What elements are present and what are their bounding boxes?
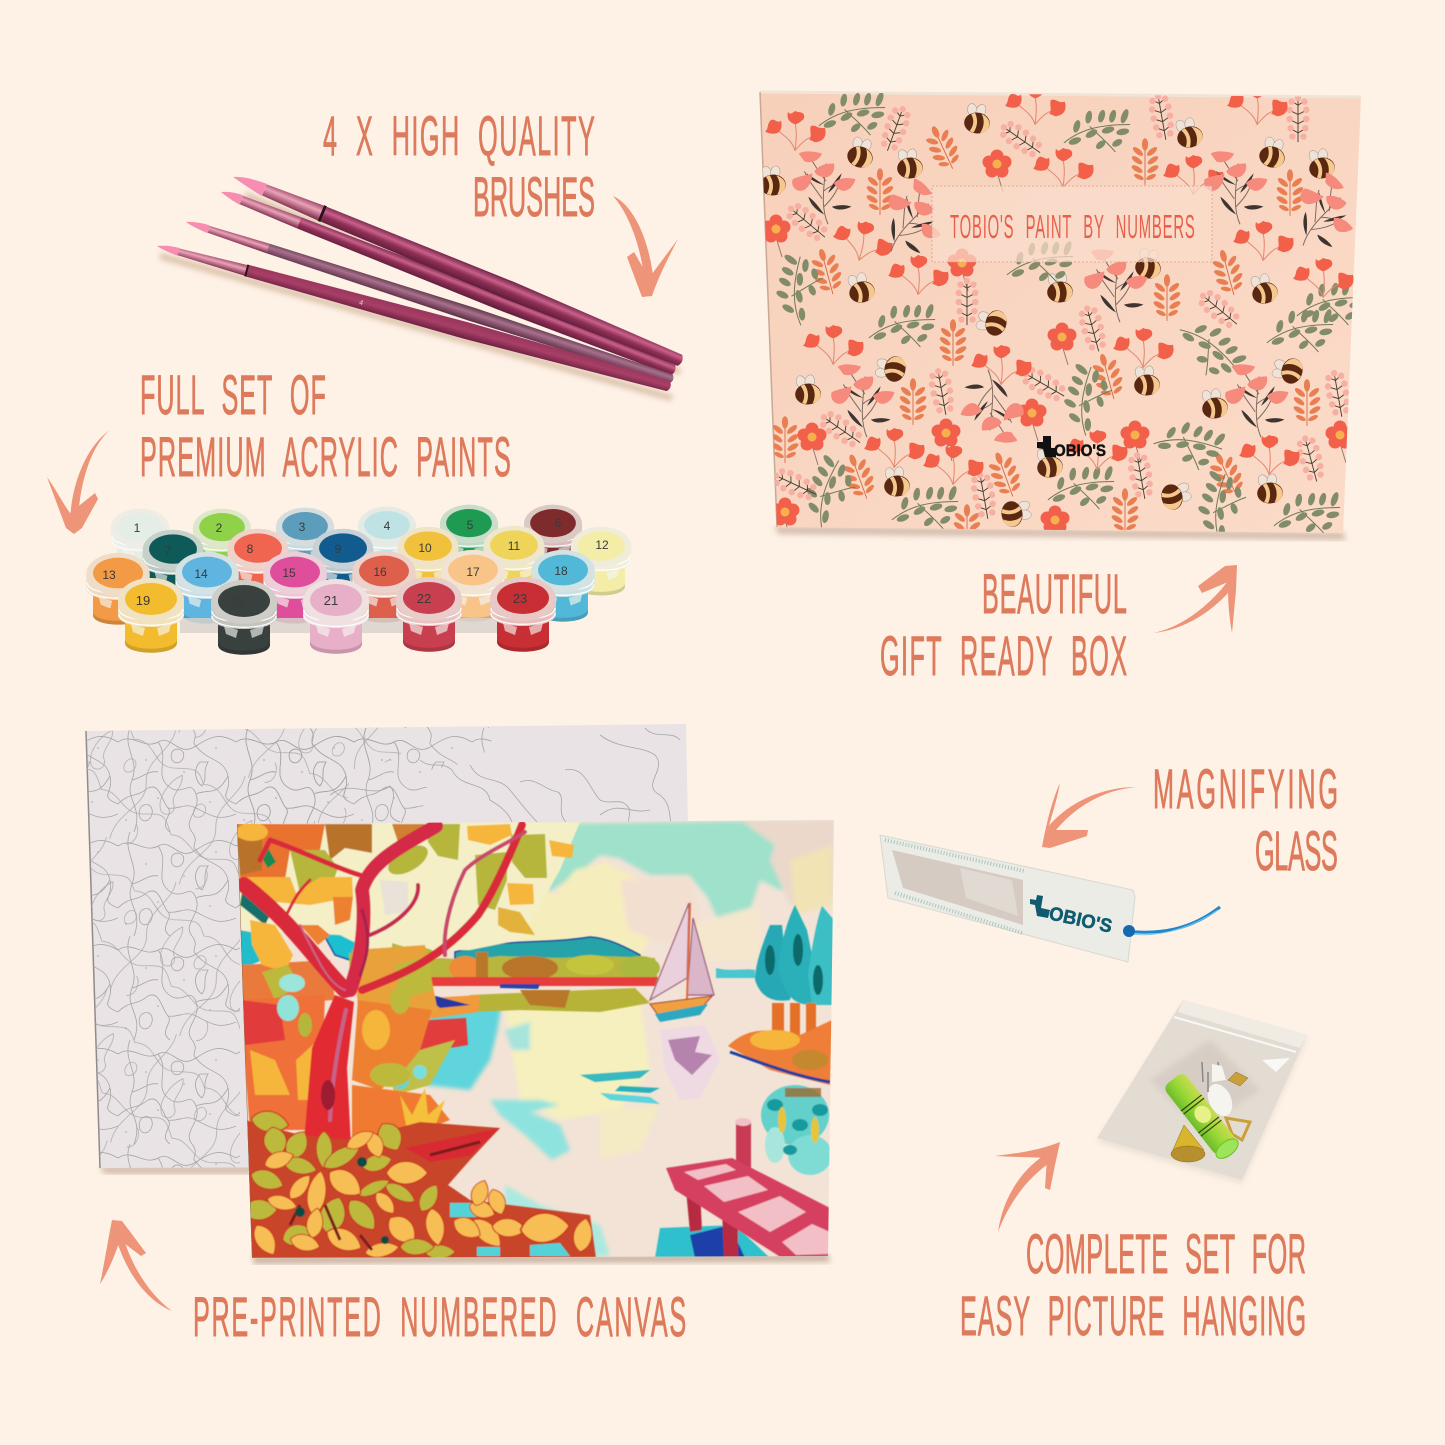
magnifying glass card — [880, 835, 1220, 962]
third row pots 13-18: 18 — [554, 564, 568, 578]
front row pots 19-23: 21 — [324, 593, 338, 608]
painting: sailboat — [650, 903, 714, 1022]
back row pots 1-6: 6 — [555, 516, 562, 530]
canvas printed outlines — [86, 727, 680, 1170]
painting: canopy — [236, 822, 580, 980]
arrow: to box — [1153, 565, 1237, 633]
arrow: to magnifier — [1042, 783, 1136, 848]
back row pots 1-6 — [111, 505, 582, 574]
brushes — [155, 168, 686, 398]
second row pots 7-12: 7 — [165, 544, 172, 558]
brush D: 4 — [358, 299, 364, 307]
magnifier logo — [1030, 895, 1114, 938]
caption: brushes: 4 X HIGH QUALITY — [323, 106, 595, 168]
painting: water gaps in foliage — [450, 1203, 570, 1256]
caption: box — [880, 564, 1127, 688]
arrow: to paints — [47, 430, 110, 534]
third row pots 13-18: 17 — [466, 565, 480, 579]
hanging kit bag — [1097, 1000, 1307, 1184]
painting: tree reflections — [761, 1085, 832, 1175]
back row pots 1-6: 4 — [384, 519, 391, 533]
blue ribbon — [1123, 907, 1220, 937]
caption: magnifier — [1153, 759, 1338, 883]
second row pots 7-12: 12 — [595, 538, 609, 552]
third row pots 13-18: 15 — [282, 566, 296, 580]
second row pots 7-12: 9 — [335, 542, 342, 556]
brush C — [184, 215, 675, 386]
pre-printed numbered canvas — [86, 724, 700, 1170]
second row pots 7-12: 11 — [508, 539, 521, 553]
spirit level tube — [1163, 1071, 1242, 1162]
third row pots 13-18: 16 — [373, 565, 387, 579]
gold hangers — [1171, 1072, 1250, 1162]
second row pots 7-12: 8 — [247, 542, 254, 556]
front row pots 19-23 — [118, 577, 556, 655]
painting: right trees — [728, 905, 834, 1085]
caption: magnifier: MAGNIFYING — [1153, 759, 1338, 821]
wall hooks — [1202, 1062, 1237, 1120]
box floral pattern — [759, 85, 1371, 551]
finished painting — [230, 815, 840, 1265]
brush A — [229, 168, 686, 370]
painting: red branch tip — [405, 1128, 500, 1162]
box logo — [1037, 436, 1106, 460]
painting: tree trunk and limbs — [244, 825, 525, 1165]
caption: hanging kit: COMPLETE SET FOR — [1026, 1224, 1306, 1286]
box label panel: TOBIO'S PAINT BY NUMBERS — [950, 210, 1195, 246]
back row pots 1-6: 1 — [134, 521, 141, 535]
caption: magnifier: GLASS — [1255, 821, 1338, 883]
caption: brushes: BRUSHES — [473, 167, 595, 229]
gift box — [759, 85, 1371, 551]
ruler marks — [885, 840, 1024, 933]
gift box shadow — [775, 526, 1346, 540]
front row pots 19-23: 20 — [230, 594, 244, 609]
caption: box: BEAUTIFUL — [982, 564, 1127, 626]
third row pots 13-18 — [86, 550, 595, 625]
painting: boat reflection — [615, 1025, 720, 1100]
painting: base — [230, 815, 840, 1265]
painting: dock — [655, 1118, 830, 1258]
arrow: to brushes — [613, 196, 678, 297]
box label panel — [932, 186, 1212, 262]
painting: left canvas edge — [237, 824, 252, 1258]
caption: box: GIFT READY BOX — [880, 626, 1127, 688]
front row pots 19-23: 19 — [136, 593, 150, 608]
magnifier lens — [892, 850, 1023, 925]
front row pots 19-23: 22 — [417, 591, 431, 606]
caption: paints: FULL SET OF — [140, 365, 326, 427]
arrow: to canvas — [100, 1220, 172, 1311]
third row pots 13-18: 14 — [194, 567, 208, 581]
box logo: OBIO'S — [1054, 441, 1106, 460]
canvas shadow — [100, 1166, 300, 1174]
back row pots 1-6: 5 — [467, 518, 474, 532]
back row pots 1-6: 2 — [216, 521, 223, 535]
brush D — [155, 238, 673, 395]
second row pots 7-12: 10 — [418, 541, 432, 555]
second row pots 7-12 — [143, 526, 631, 599]
front row pots 19-23: 23 — [513, 591, 527, 606]
painting: mid foliage — [240, 920, 450, 1140]
painting: sky and lake washes — [410, 820, 834, 1258]
painting: hills — [324, 934, 756, 979]
caption: paints: PREMIUM ACRYLIC PAINTS — [140, 427, 511, 489]
paint pots — [86, 505, 631, 655]
painting: distant treeline — [420, 952, 660, 989]
painting shadow — [252, 1254, 830, 1264]
back row pots 1-6: 3 — [299, 520, 306, 534]
painting: shore reflections — [385, 988, 660, 1104]
painting: foreground foliage bed — [245, 1120, 596, 1258]
brush shadows — [160, 195, 680, 398]
brush B — [218, 185, 678, 378]
pot tray — [180, 618, 500, 633]
caption: hanging kit: EASY PICTURE HANGING — [960, 1286, 1306, 1348]
caption: brushes — [323, 106, 595, 229]
arrow: to hanging kit — [995, 1142, 1060, 1232]
third row pots 13-18: 13 — [102, 568, 116, 582]
caption: paints — [140, 365, 511, 489]
caption: hanging kit — [960, 1224, 1306, 1348]
caption: canvas: PRE-PRINTED NUMBERED CANVAS — [193, 1287, 686, 1349]
magnifier logo: OBIO'S — [1047, 903, 1114, 938]
painting: foreground leaves — [243, 1108, 595, 1260]
infographic canvas — [47, 90, 1361, 1337]
